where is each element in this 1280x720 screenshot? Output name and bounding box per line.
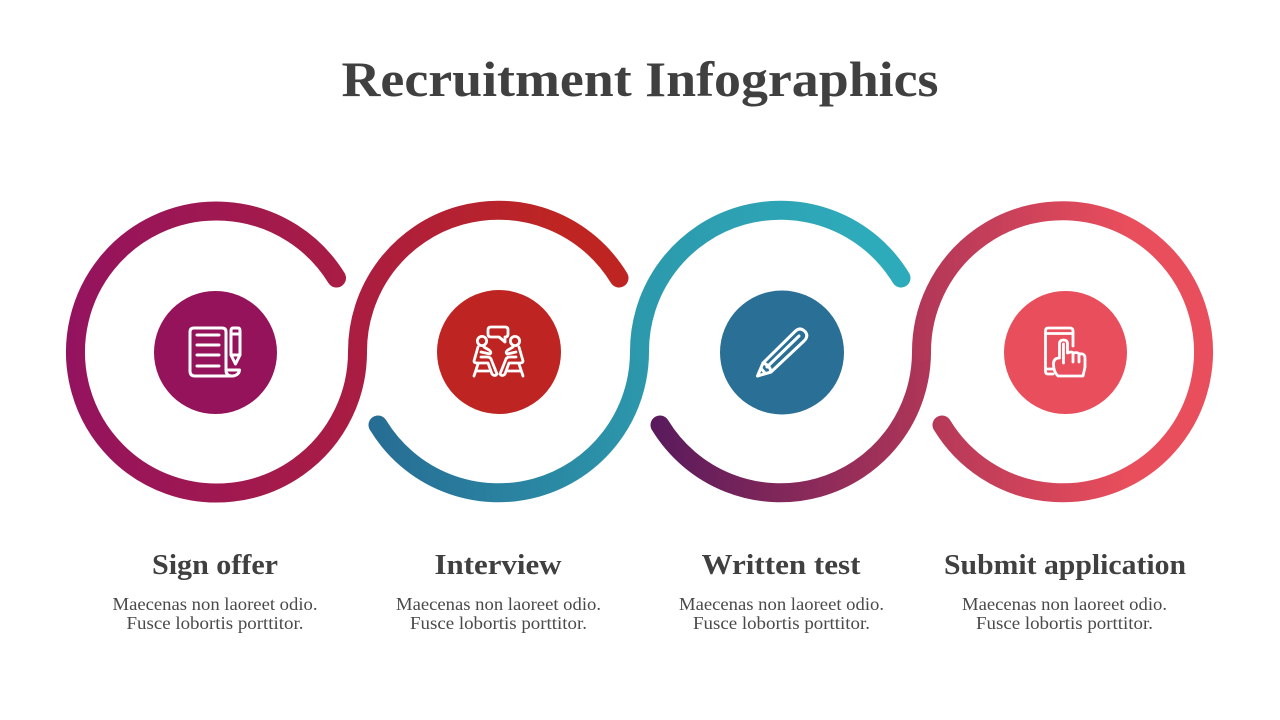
heading: sign offer: Sign offer: [152, 549, 278, 581]
badge: written test: [720, 290, 844, 414]
ring: submit application: [921, 211, 1203, 493]
text block: interview: Fusce lobortis porttitor.: [410, 613, 587, 633]
heading: interview: Interview: [434, 549, 562, 581]
text block: submit application: Maecenas non laoreet odio.: [962, 594, 1167, 614]
text block: written test: [679, 594, 884, 633]
ring: written test: [639, 210, 901, 352]
icon: two people talking: [474, 327, 523, 376]
step: interview: [396, 549, 601, 633]
badge: sign offer: [154, 291, 277, 414]
text block: submit application: Fusce lobortis porttitor.: [976, 613, 1153, 633]
text block: sign offer: Maecenas non laoreet odio.: [112, 594, 318, 614]
text block: written test: Maecenas non laoreet odio.: [679, 594, 884, 614]
ring: interview: [357, 210, 619, 352]
step: sign offer: [112, 549, 318, 633]
ring: interview lower arc: [378, 352, 640, 493]
heading: written test: Written test: [702, 549, 861, 581]
text block: submit application: [962, 594, 1167, 633]
text block: sign offer: [112, 594, 318, 633]
text block: sign offer: Fusce lobortis porttitor.: [126, 613, 304, 633]
step: written test: [679, 549, 884, 633]
ring: written test lower arc: [660, 352, 922, 493]
title: Recruitment Infographics: [342, 51, 938, 107]
heading: submit application: Submit application: [944, 549, 1186, 581]
text block: interview: Maecenas non laoreet odio.: [396, 594, 601, 614]
badge: submit application: [1004, 291, 1127, 414]
badge: interview: [437, 290, 561, 414]
icon: pencil: [758, 329, 807, 376]
text block: written test: Fusce lobortis porttitor.: [693, 613, 870, 633]
ring: sign offer: [76, 211, 358, 493]
step: submit application: [944, 549, 1186, 633]
text block: interview: [396, 594, 601, 633]
icon: phone with tapping hand: [1046, 328, 1085, 376]
icon: document and pencil: [190, 328, 240, 376]
